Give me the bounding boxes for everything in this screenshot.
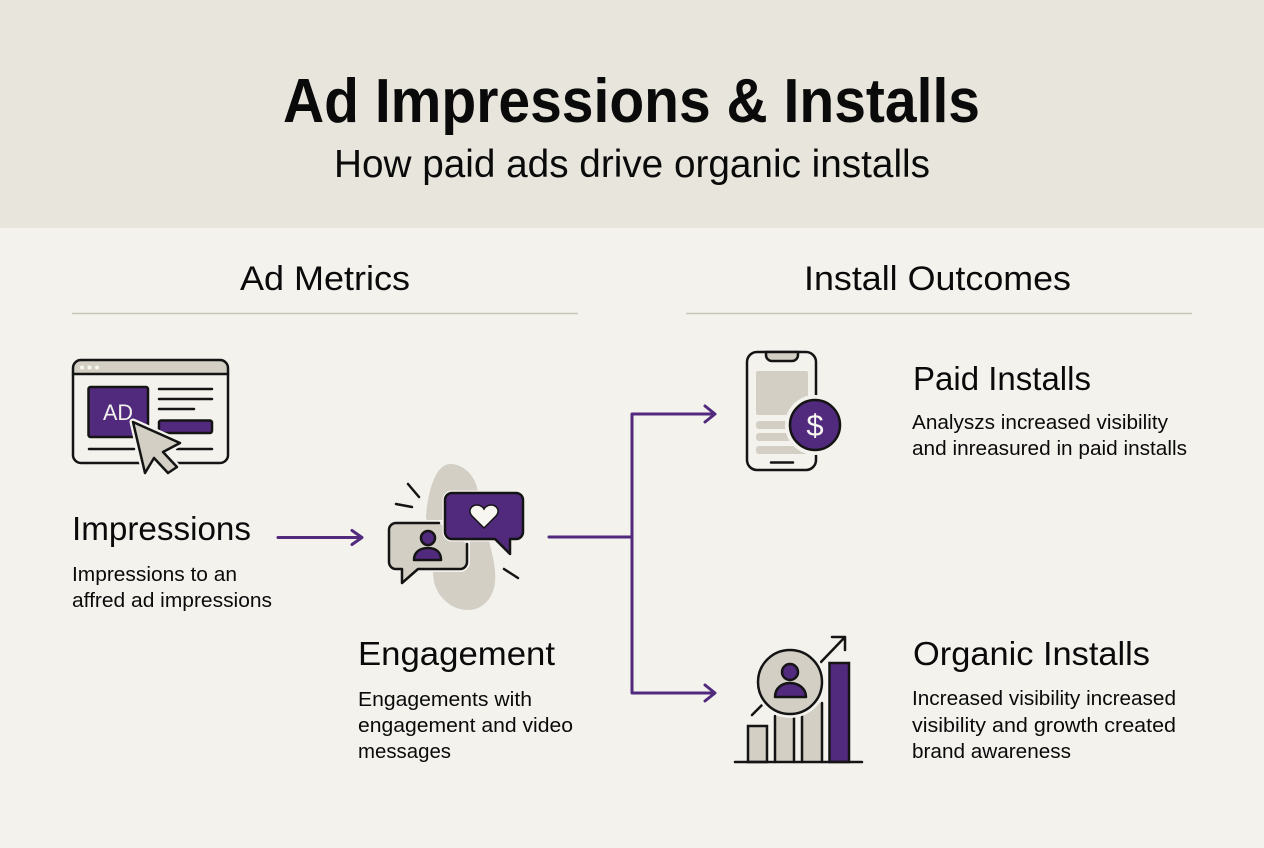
text block: organic installs: visibility and growth created <box>912 715 1176 737</box>
text block: impressions: Impressions to an <box>72 564 237 586</box>
icon: growth bar chart with user <box>735 637 862 762</box>
text block: paid installs <box>912 360 1187 460</box>
section heading: ad metrics: Ad Metrics <box>240 260 410 298</box>
icon: browser ad with cursor <box>73 360 228 473</box>
text block: organic installs: Organic Installs <box>913 635 1150 672</box>
text block: paid installs: Paid Installs <box>913 360 1091 397</box>
text block: organic installs: Increased visibility increased <box>912 688 1176 710</box>
title: Ad Impressions & Installs <box>283 67 980 136</box>
text block: engagement <box>358 635 573 763</box>
text block: impressions: affred ad impressions <box>72 590 272 612</box>
icon: phone with dollar coin <box>747 352 845 470</box>
text block: impressions: Impressions <box>72 510 251 547</box>
text block: engagement: Engagement <box>358 635 555 672</box>
text block: organic installs <box>912 635 1176 763</box>
text block: engagement: messages <box>358 741 451 763</box>
arrow: impressions to engagement <box>278 530 362 544</box>
text block: paid installs: Analyszs increased visibility <box>912 412 1168 434</box>
icon: chat bubbles <box>389 464 523 610</box>
text block: engagement: Engagements with <box>358 689 532 711</box>
header band <box>0 0 1264 228</box>
text block: impressions <box>72 510 272 612</box>
icon: phone with dollar coin: $ <box>806 408 824 443</box>
text block: engagement: engagement and video <box>358 715 573 737</box>
section heading: install outcomes: Install Outcomes <box>804 260 1071 298</box>
text block: organic installs: brand awareness <box>912 741 1071 763</box>
icon: browser ad with cursor: AD <box>103 400 133 425</box>
arrow: engagement branching to paid and organic installs <box>549 406 715 701</box>
subtitle: How paid ads drive organic installs <box>334 143 930 186</box>
text block: paid installs: and inreasured in paid installs <box>912 438 1187 460</box>
